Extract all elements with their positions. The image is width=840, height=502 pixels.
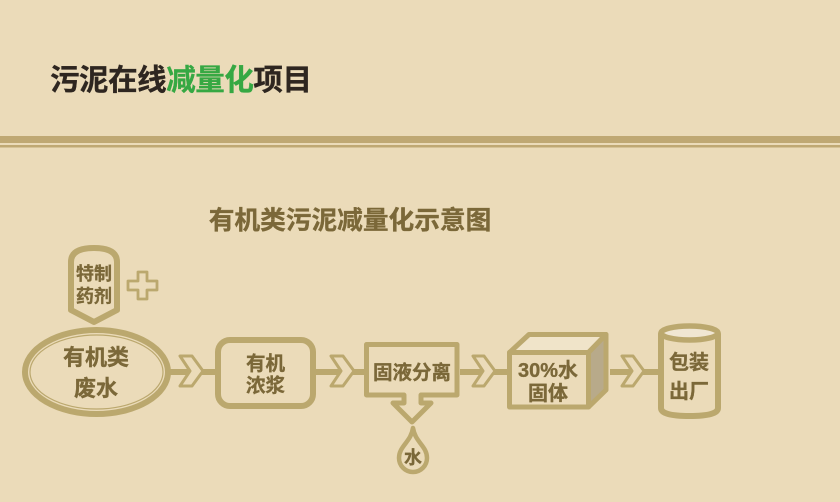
title: 污泥在线减量化项目	[50, 64, 312, 97]
packaging cylinder	[661, 326, 718, 416]
special reagent tag	[71, 248, 117, 322]
solid box with 30% water: 固体	[528, 382, 568, 405]
organic slurry box	[218, 340, 313, 406]
solid-liquid separation box	[366, 344, 457, 422]
organic wastewater ellipse	[25, 330, 168, 414]
process diagram	[25, 248, 718, 472]
organic wastewater ellipse: 废水	[74, 376, 118, 401]
packaging cylinder: 包装	[669, 351, 709, 374]
solid-liquid separation box: 固液分离	[373, 361, 451, 384]
organic wastewater ellipse: 有机类	[63, 345, 129, 370]
packaging cylinder: 出厂	[669, 380, 709, 403]
special reagent tag: 药剂	[76, 286, 112, 306]
organic slurry box: 有机	[246, 353, 285, 375]
water drop	[399, 428, 427, 472]
solid box with 30% water: 30%水	[518, 359, 578, 382]
special reagent tag: 特制	[76, 264, 112, 284]
arrow connectors	[168, 356, 660, 386]
water drop: 水	[404, 448, 422, 468]
solid box with 30% water	[510, 334, 606, 407]
diagram heading: 有机类污泥减量化示意图	[209, 206, 491, 235]
organic slurry box: 浓浆	[246, 375, 285, 397]
plus icon	[128, 272, 157, 299]
